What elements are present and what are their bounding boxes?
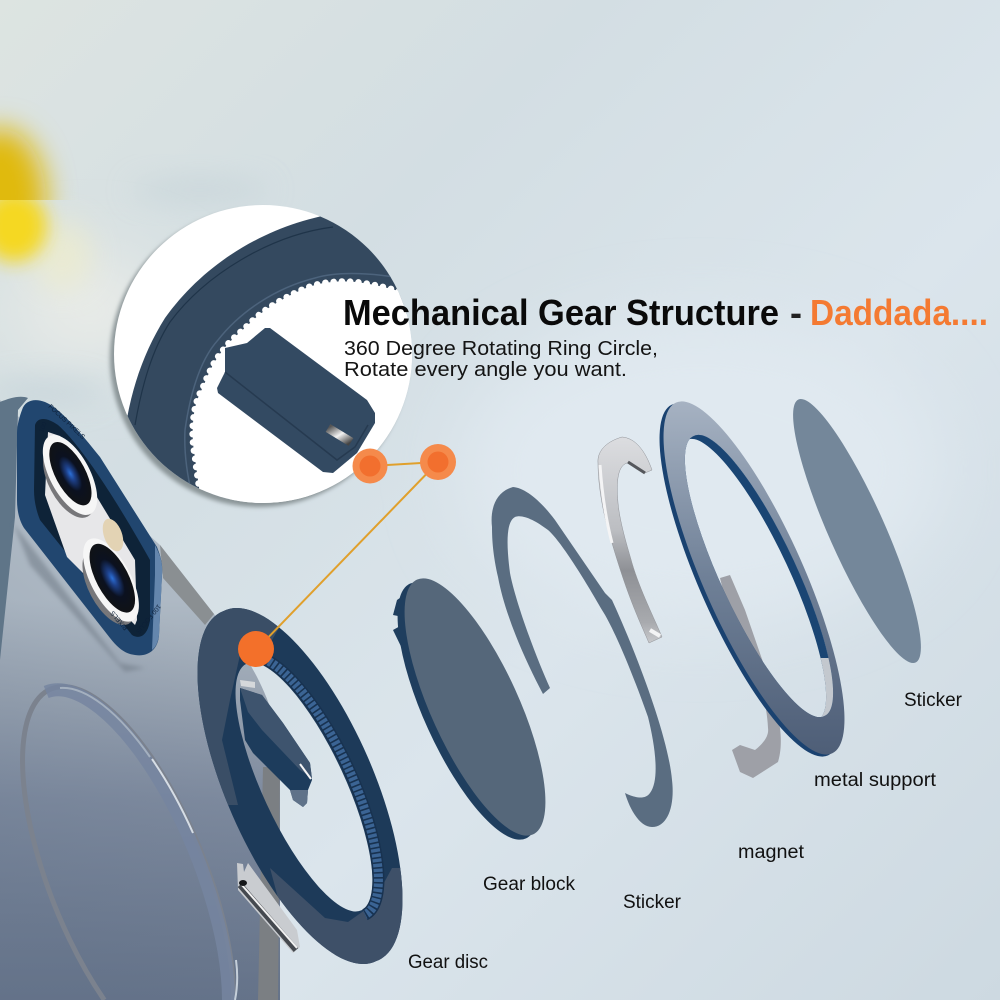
gear teeth — [245, 656, 378, 915]
sticker disc — [773, 388, 941, 674]
orange marker on ring — [238, 631, 274, 667]
lens top — [28, 427, 109, 526]
label: gear disc: Gear disc — [408, 952, 488, 973]
engraved text top: FOCUS PIXELS — [47, 403, 87, 441]
lens bottom — [67, 530, 151, 633]
engraved text top number: 100 — [38, 421, 49, 434]
camera plate — [45, 432, 137, 625]
sticker C shape — [492, 487, 673, 827]
label: magnet: magnet — [738, 842, 805, 863]
label: sticker: Sticker — [904, 690, 963, 711]
zoomed tab — [217, 328, 375, 473]
magnet back piece — [720, 575, 781, 778]
gear disc ring — [198, 608, 402, 964]
orange marker joint — [420, 444, 456, 480]
phone back — [0, 400, 280, 1000]
metal hinge — [237, 863, 300, 953]
magnifier disc — [114, 205, 412, 503]
connector lines — [258, 462, 438, 648]
zoomed gear band — [128, 216, 406, 500]
ring face — [664, 401, 844, 755]
title: Mechanical Gear Structure — [343, 292, 779, 333]
ring tab — [240, 680, 312, 807]
engraved text bottom right: 100 FOCUS — [134, 603, 162, 635]
subtitle: Rotate every angle you want. — [344, 359, 627, 381]
title: Daddada.... — [810, 292, 988, 333]
support ring inner wall — [690, 434, 834, 717]
camera inner frame — [34, 419, 150, 637]
zoomed white centre — [193, 281, 415, 520]
orange marker near magnifier — [352, 448, 388, 484]
magnetic circle outline — [23, 687, 237, 1000]
magnifier callout — [110, 205, 420, 520]
phone case — [0, 397, 280, 1000]
gear teeth edge — [193, 281, 415, 495]
phone left frame — [0, 397, 28, 660]
camera island — [17, 400, 162, 655]
metal support ring — [660, 401, 844, 757]
engraved text bottom left: PIXELS — [109, 609, 130, 631]
phone edge diagonal — [160, 545, 214, 625]
blue rim — [660, 403, 840, 757]
label: sticker lower: Sticker — [623, 892, 682, 913]
ring body — [197, 608, 403, 964]
gear block — [370, 561, 573, 857]
zoomed pin — [328, 428, 351, 442]
phone edge vertical — [258, 767, 280, 1000]
camera island shadow — [13, 523, 145, 672]
ring light faces — [198, 608, 402, 964]
subtitle: 360 Degree Rotating Ring Circle, — [344, 338, 658, 360]
label: gear block: Gear block — [483, 874, 575, 895]
magnet — [598, 437, 662, 643]
flash — [99, 516, 127, 554]
title: - — [790, 292, 802, 333]
magnifier shadow — [110, 209, 408, 507]
label: metal support: metal support — [814, 770, 937, 791]
